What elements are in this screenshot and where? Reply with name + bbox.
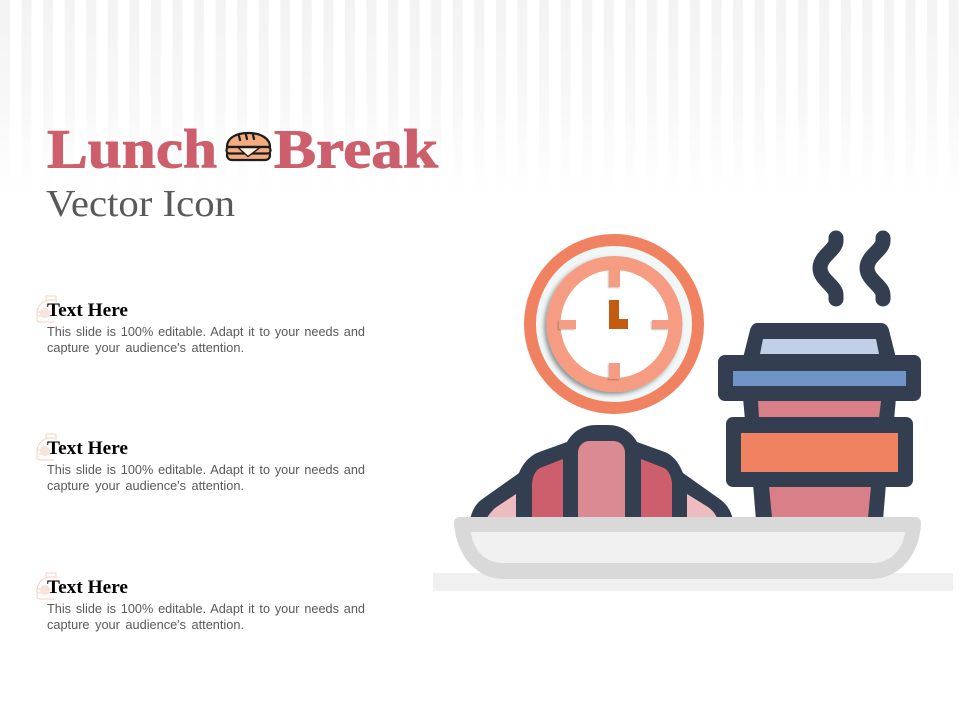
heading 3: Text Here [47,578,128,598]
croissant sides [532,459,563,518]
icon: faded bullet 3 [37,573,56,599]
body text 1 [47,325,365,355]
background: striped header band [0,0,960,196]
clock face ring [546,256,682,392]
icon: faded bullet 2 [37,434,56,460]
clock face centre [560,270,668,378]
body text 3: capture your audience's attention. [47,618,244,632]
cup sleeve [726,417,913,487]
cup lid band [718,355,921,401]
heading 1: Text Here [47,301,128,321]
icon: steam [820,238,883,299]
croissant outline [470,425,733,520]
croissant centre [578,441,625,518]
title: Lunch Break: Lunch [47,118,217,180]
clock outer ring [530,240,698,408]
cup lid top [743,323,896,358]
text block 3 [37,573,365,632]
cup lower body [753,484,886,520]
text block 1 [37,296,365,355]
icon: croissant [470,425,733,520]
subtitle: Vector Icon: Vector Icon [46,183,235,225]
body text 2 [47,463,365,493]
icon: clock [530,240,698,408]
text block 2 [37,434,365,493]
clock ticks [559,269,669,379]
table surface [433,573,953,591]
body text 1: capture your audience's attention. [47,341,244,355]
icon: stacked coffee cup [718,323,921,520]
cup middle body [743,398,896,420]
icon: sandwich in title [226,133,270,160]
icon: plate [454,517,921,579]
body text 3: This slide is 100% editable. Adapt it to your needs and [47,602,365,616]
body text 2: capture your audience's attention. [47,479,244,493]
body text 3 [47,602,365,632]
clock hands [609,300,628,329]
icon: faded bullet 1 [37,296,56,322]
body text 1: This slide is 100% editable. Adapt it to your needs and [47,325,365,339]
body text 2: This slide is 100% editable. Adapt it to your needs and [47,463,365,477]
croissant tips [487,494,516,518]
title: Lunch Break: Break [274,118,438,180]
heading 2: Text Here [47,439,128,459]
title: Lunch Break [47,118,438,180]
